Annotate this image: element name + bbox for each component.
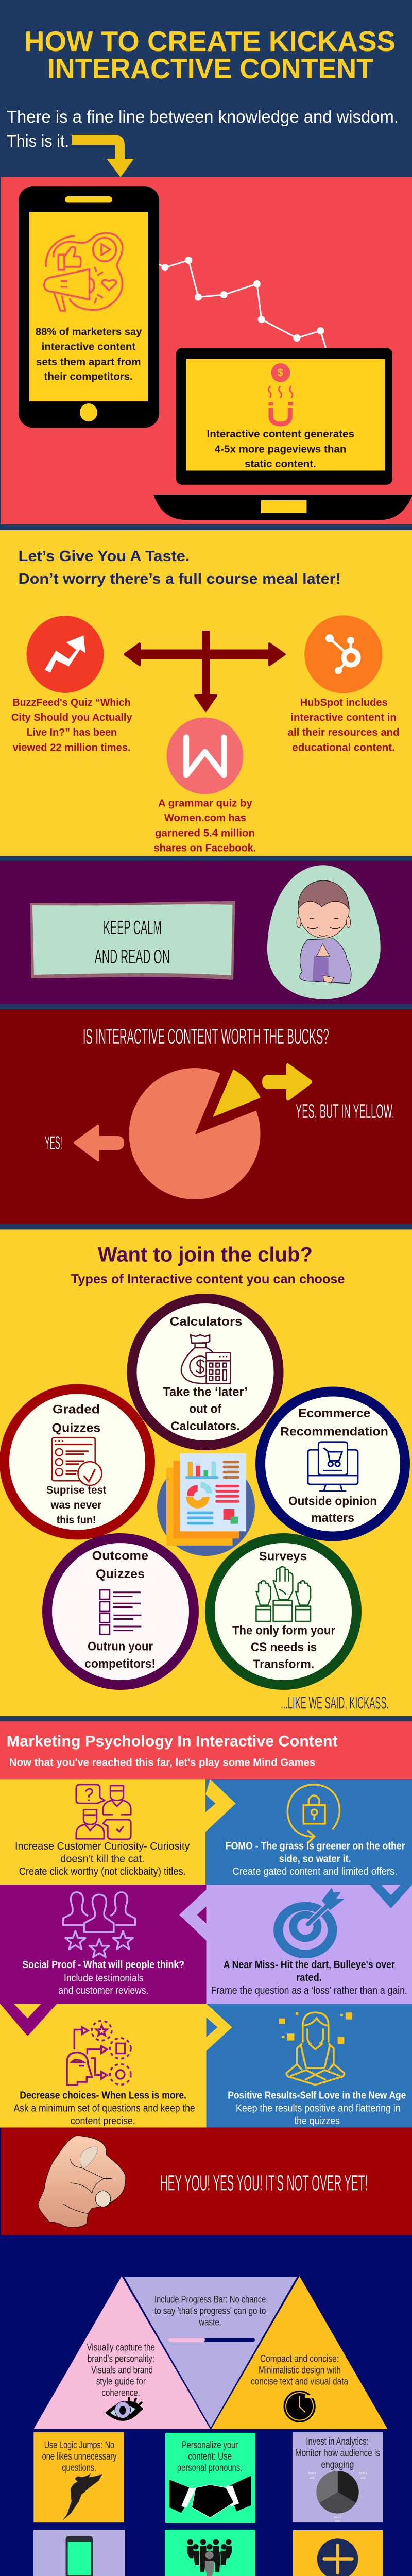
phone text: sets them apart from — [36, 357, 141, 368]
phone text: their competitors. — [44, 371, 133, 382]
text: Personalize your — [182, 2440, 238, 2451]
text: Use Logic Jumps: No — [44, 2440, 114, 2451]
arrow: yellow — [262, 1063, 312, 1101]
laptop — [153, 348, 412, 520]
text: and customer reviews. — [58, 1985, 148, 1996]
phone text — [36, 327, 142, 382]
text: engaging — [321, 2460, 354, 2470]
text: Quizzes — [52, 1421, 100, 1435]
icon: list — [100, 1590, 141, 1634]
text: Compact and concise: — [260, 2353, 339, 2364]
icon: crowd — [187, 2539, 232, 2576]
panel: hey you — [0, 2128, 412, 2235]
text: buzzfeed quiz — [11, 697, 132, 753]
text: content: Use — [188, 2451, 232, 2462]
icon: phone — [66, 2536, 93, 2576]
text — [15, 1841, 190, 1877]
phone text: 88% of marketers say — [36, 327, 142, 338]
heading: Want to join the club? — [98, 1244, 313, 1266]
title — [24, 25, 396, 84]
text: matters — [311, 1511, 354, 1525]
cell: social proof — [0, 1885, 206, 2004]
laptop text: 4-5x more pageviews than — [215, 444, 346, 455]
laptop: $ — [277, 367, 283, 379]
text: hubspot: HubSpot includes — [300, 697, 388, 708]
text: rated. — [296, 1972, 322, 1984]
triangle: progress bar — [124, 2277, 297, 2428]
text: Surveys — [259, 1549, 307, 1563]
panel: join the club — [0, 1229, 412, 1716]
text: buzzfeed quiz: City Should you Actually — [11, 712, 132, 723]
text — [295, 2436, 380, 2470]
text: out of — [189, 1402, 222, 1416]
box: cta — [293, 2530, 383, 2576]
phone — [19, 186, 159, 428]
intro text: There is a fine line between knowledge and wisdom. — [7, 107, 399, 126]
text: one likes unnecessary — [42, 2451, 117, 2462]
icon: lock with arrow — [287, 1785, 339, 1843]
text: Graded — [53, 1402, 100, 1416]
text: was never — [50, 1499, 101, 1511]
text — [22, 1959, 184, 1996]
text: doesn’t kill the cat. — [60, 1853, 145, 1865]
icon: head with choices — [67, 2021, 131, 2085]
subheading: Types of Interactive content you can choose — [71, 1271, 345, 1286]
text: women.com: shares on Facebook. — [153, 842, 256, 854]
title: HOW TO CREATE KICKASS — [24, 25, 396, 57]
text: buzzfeed quiz: BuzzFeed's Quiz “Which — [12, 697, 131, 708]
text: competitors! — [84, 1657, 156, 1671]
text: content precise. — [71, 2115, 135, 2127]
arrow: down to stats — [72, 135, 134, 177]
text — [226, 1840, 405, 1877]
box: logic jumps — [33, 2432, 124, 2522]
laptop text: Interactive content generates — [207, 429, 354, 440]
text: Create click worthy (not clickbaity) titles. — [19, 1866, 186, 1877]
chart: three slice pie: Item 1 — [359, 2472, 367, 2475]
text: women.com — [153, 798, 256, 854]
text: Create gated content and limited offers. — [233, 1866, 397, 1877]
panel: keep calm — [0, 861, 412, 1004]
note: keep calm: KEEP CALM — [103, 917, 162, 939]
text: Outside opinion — [288, 1494, 377, 1508]
text: Include testimonials — [64, 1973, 144, 1984]
icon: meditating baby — [267, 865, 381, 999]
text: hubspot: all their resources and — [288, 727, 400, 738]
text: Visuals and brand — [91, 2365, 153, 2376]
text: Social Proof - What will people think? — [22, 1959, 184, 1971]
text: women.com: garnered 5.4 million — [155, 827, 255, 839]
icon: people and stars — [63, 1892, 135, 1957]
panel: marketing psychology heading — [0, 1721, 412, 1779]
text: Monitor how audience is — [295, 2448, 380, 2459]
icon: meditating woman — [286, 2012, 344, 2085]
chart: three slice pie: Item 3 — [308, 2472, 316, 2475]
laptop text — [207, 429, 354, 470]
chart: three slice pie: 33% — [310, 2477, 315, 2480]
text: Minimalistic design with — [259, 2365, 341, 2376]
note: keep calm — [30, 901, 235, 980]
card: outcome quizzes — [47, 1538, 194, 1685]
cell: fomo — [205, 1779, 412, 1885]
card: surveys — [210, 1538, 356, 1685]
icon: magnet and coin — [268, 363, 293, 424]
text: Decrease choices- When Less is more. — [20, 2090, 186, 2101]
card: calculators — [132, 1298, 279, 1446]
text — [280, 1406, 388, 1525]
text: Ecommerce — [298, 1406, 370, 1420]
panel: title header — [0, 0, 412, 177]
chart: three slice pie — [308, 2471, 367, 2523]
text: Quizzes — [96, 1567, 145, 1581]
heading: Let’s Give You A Taste. — [19, 548, 190, 565]
text — [154, 2295, 266, 2328]
intro text: This is it. — [7, 131, 69, 150]
text: Calculators. — [171, 1419, 240, 1433]
laptop text: static content. — [245, 459, 316, 470]
icon: eye — [105, 2397, 143, 2421]
text: Recommendation — [280, 1425, 388, 1439]
text — [84, 1549, 156, 1671]
sparkles — [279, 2012, 352, 2044]
text: style guide for — [96, 2377, 146, 2387]
icon: quiz checklist — [52, 1437, 101, 1485]
panel: best practices mosaic — [0, 2235, 412, 2576]
icon: raised hands — [256, 1567, 311, 1621]
text: side, so water it. — [279, 1853, 351, 1865]
text: personal pronouns. — [177, 2463, 242, 2473]
icon: people with speech bubbles — [76, 1785, 131, 1839]
text — [251, 2353, 348, 2387]
box: mobile — [33, 2530, 125, 2576]
icon: money bag and calculator — [181, 1335, 230, 1383]
title: INTERACTIVE CONTENT — [47, 53, 373, 84]
line chart — [159, 257, 326, 348]
text: women.com: Women.com has — [164, 812, 246, 824]
text: Outrun your — [88, 1640, 153, 1654]
panel: psychology grid — [0, 1779, 412, 2128]
box: analytics — [293, 2432, 383, 2523]
panel: a taste examples — [0, 530, 412, 856]
text: CS needs is — [251, 1640, 317, 1654]
text: questions. — [62, 2463, 96, 2473]
icon: clock — [284, 2390, 316, 2422]
text: A Near Miss- Hit the dart, Bulleye's over — [224, 1959, 395, 1971]
text: hubspot: educational content. — [292, 742, 395, 753]
text: the quizzes — [294, 2115, 340, 2127]
icon: pointing fist — [38, 2136, 126, 2227]
card: ecommerce recommendation — [261, 1392, 405, 1536]
text: waste. — [198, 2317, 221, 2328]
text: Calculators — [170, 1315, 242, 1329]
text: Include Progress Bar: No chance — [154, 2295, 266, 2305]
icon: handshake — [169, 2476, 251, 2518]
text: Increase Customer Curiosity- Curiosity — [15, 1841, 190, 1852]
text: Outcome — [92, 1549, 148, 1563]
arrows: three directions — [125, 632, 285, 711]
cell: near miss — [206, 1885, 412, 2004]
cell: curiosity — [0, 1779, 206, 1885]
chart: three slice pie: 33% — [360, 2477, 366, 2480]
text: Suprise test — [46, 1484, 107, 1496]
text: this fun! — [57, 1514, 96, 1526]
icon: megaphone and social — [44, 233, 123, 311]
icon: buzzfeed — [27, 616, 104, 693]
text: Take the ‘later’ — [163, 1385, 248, 1399]
cell: positive results — [206, 2004, 412, 2128]
illustration: report pages — [157, 1453, 255, 1556]
text — [228, 2090, 406, 2127]
cell: decrease choices — [0, 2004, 206, 2128]
text: The only form your — [232, 1623, 335, 1637]
text — [163, 1315, 248, 1433]
text: buzzfeed quiz: Live In?” has been — [27, 727, 117, 738]
text — [42, 2440, 117, 2473]
subheading: Now that you've reached this far, let's play some Mind Games — [9, 1757, 315, 1769]
icon: hubspot — [304, 615, 382, 693]
box: target audience — [165, 2530, 255, 2576]
chart: three slice pie: 33% — [335, 2520, 340, 2523]
text: brand’s personality: — [88, 2353, 154, 2364]
card: graded quizzes — [4, 1389, 150, 1535]
text: Ask a minimum set of questions and keep the — [13, 2103, 195, 2114]
icon: cart in monitor — [308, 1442, 358, 1492]
chart: three slice pie: Item 2 — [334, 2516, 341, 2519]
heading: Don’t worry there’s a full course meal later! — [19, 571, 341, 587]
icon: plus — [317, 2538, 358, 2576]
panel: worth the bucks: YES! — [45, 1132, 62, 1154]
text: buzzfeed quiz: viewed 22 million times. — [12, 742, 131, 753]
progress bar — [168, 2338, 255, 2342]
text: to say 'that's progress' can go to — [154, 2306, 266, 2317]
heading — [19, 548, 341, 587]
panel: worth the bucks — [0, 1009, 412, 1224]
text: Visually capture the — [87, 2342, 155, 2353]
text — [211, 1959, 407, 1996]
text — [46, 1402, 107, 1526]
text: coherence. — [101, 2387, 140, 2399]
panel: stats devices — [1, 177, 412, 524]
icon: women.com — [167, 717, 243, 794]
intro text — [7, 107, 399, 150]
heading: Marketing Psychology In Interactive Content — [7, 1733, 338, 1750]
text: Transform. — [253, 1657, 314, 1671]
phone text: interactive content — [42, 341, 136, 352]
text — [87, 2342, 155, 2399]
text: hubspot — [288, 697, 400, 753]
pie chart — [129, 1068, 261, 1199]
box: personalize — [165, 2433, 255, 2523]
text: hubspot: interactive content in — [290, 712, 397, 723]
icon: dancer — [62, 2473, 102, 2520]
text — [177, 2440, 242, 2473]
triangle: brand personality — [33, 2276, 210, 2429]
text — [13, 2090, 195, 2127]
text — [232, 1549, 335, 1671]
text: concise text and visual data — [251, 2377, 348, 2387]
arrow: salmon — [74, 1125, 124, 1161]
arrows: flow chevrons — [0, 1779, 412, 2051]
note: keep calm: AND READ ON — [95, 946, 170, 968]
text: Invest in Analytics: — [306, 2436, 369, 2447]
text: women.com: A grammar quiz by — [158, 798, 253, 809]
triangle: compact and concise — [211, 2276, 387, 2429]
icon: target and dart — [273, 1888, 344, 1958]
